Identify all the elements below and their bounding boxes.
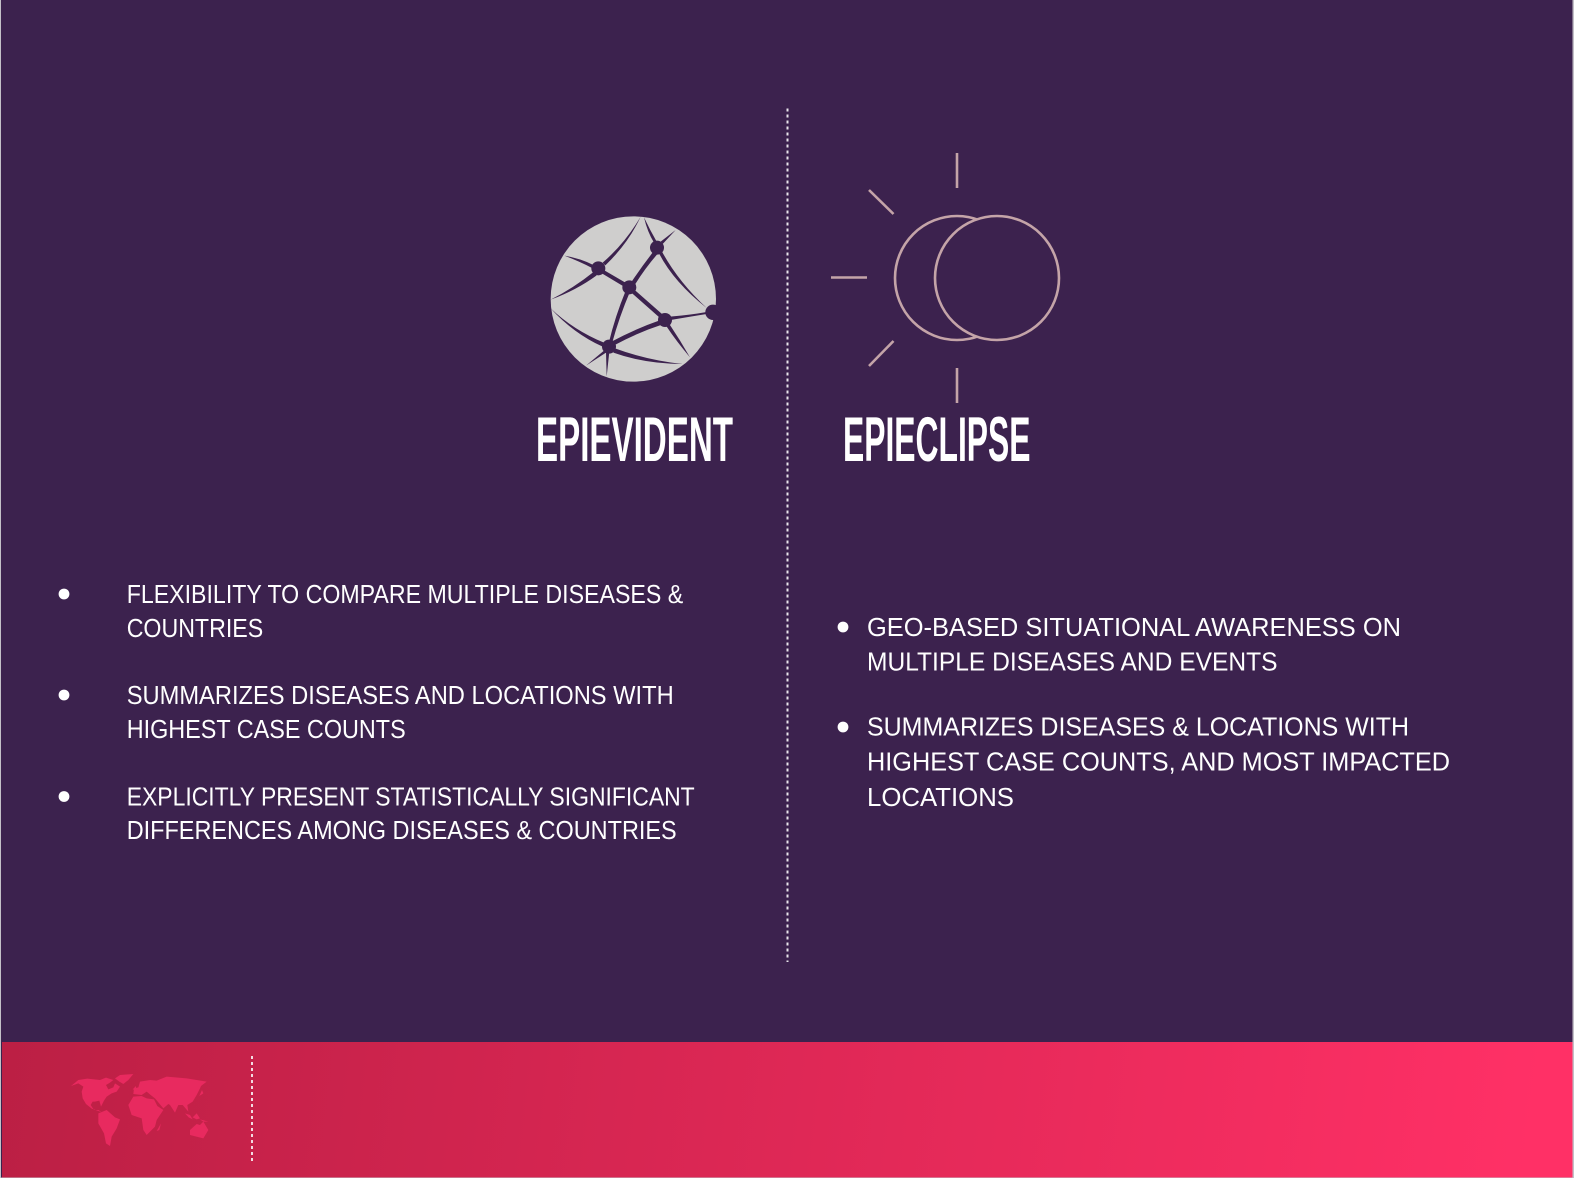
icon: network globe <box>551 216 721 382</box>
bullet list: EpiEvident <box>59 579 695 845</box>
footer band <box>2 1042 1572 1178</box>
icon: world map <box>71 1074 208 1146</box>
icon: eclipse <box>831 153 1059 403</box>
bullet 1: MULTIPLE DISEASES AND EVENTS <box>867 646 1278 676</box>
bullet 1: GEO-BASED SITUATIONAL AWARENESS ON <box>867 612 1401 642</box>
bullet 1 <box>59 579 683 643</box>
bullet 2 <box>838 712 1450 812</box>
heading: EpiEclipse: EPIECLIPSE <box>843 405 1030 475</box>
bullet 2: HIGHEST CASE COUNTS <box>127 714 406 744</box>
bullet list: EpiEclipse <box>838 612 1450 812</box>
bullet 2 <box>59 680 674 744</box>
heading: EpiEvident: EPIEVIDENT <box>536 405 733 475</box>
panel: EpiEvident <box>59 216 733 845</box>
bullet 1 <box>838 612 1401 676</box>
panel: EpiEclipse <box>831 153 1450 812</box>
bullet 2: SUMMARIZES DISEASES AND LOCATIONS WITH <box>127 680 674 710</box>
bullet 2: HIGHEST CASE COUNTS, AND MOST IMPACTED <box>867 746 1450 776</box>
bullet 1: FLEXIBILITY TO COMPARE MULTIPLE DISEASES & <box>127 579 683 609</box>
bullet 3: DIFFERENCES AMONG DISEASES & COUNTRIES <box>127 815 677 845</box>
bullet 3: EXPLICITLY PRESENT STATISTICALLY SIGNIFICANT <box>127 782 695 812</box>
bullet 2: SUMMARIZES DISEASES & LOCATIONS WITH <box>867 712 1409 742</box>
bullet 1: COUNTRIES <box>127 613 263 643</box>
bullet 2: LOCATIONS <box>867 782 1014 812</box>
bullet 3 <box>59 782 695 845</box>
